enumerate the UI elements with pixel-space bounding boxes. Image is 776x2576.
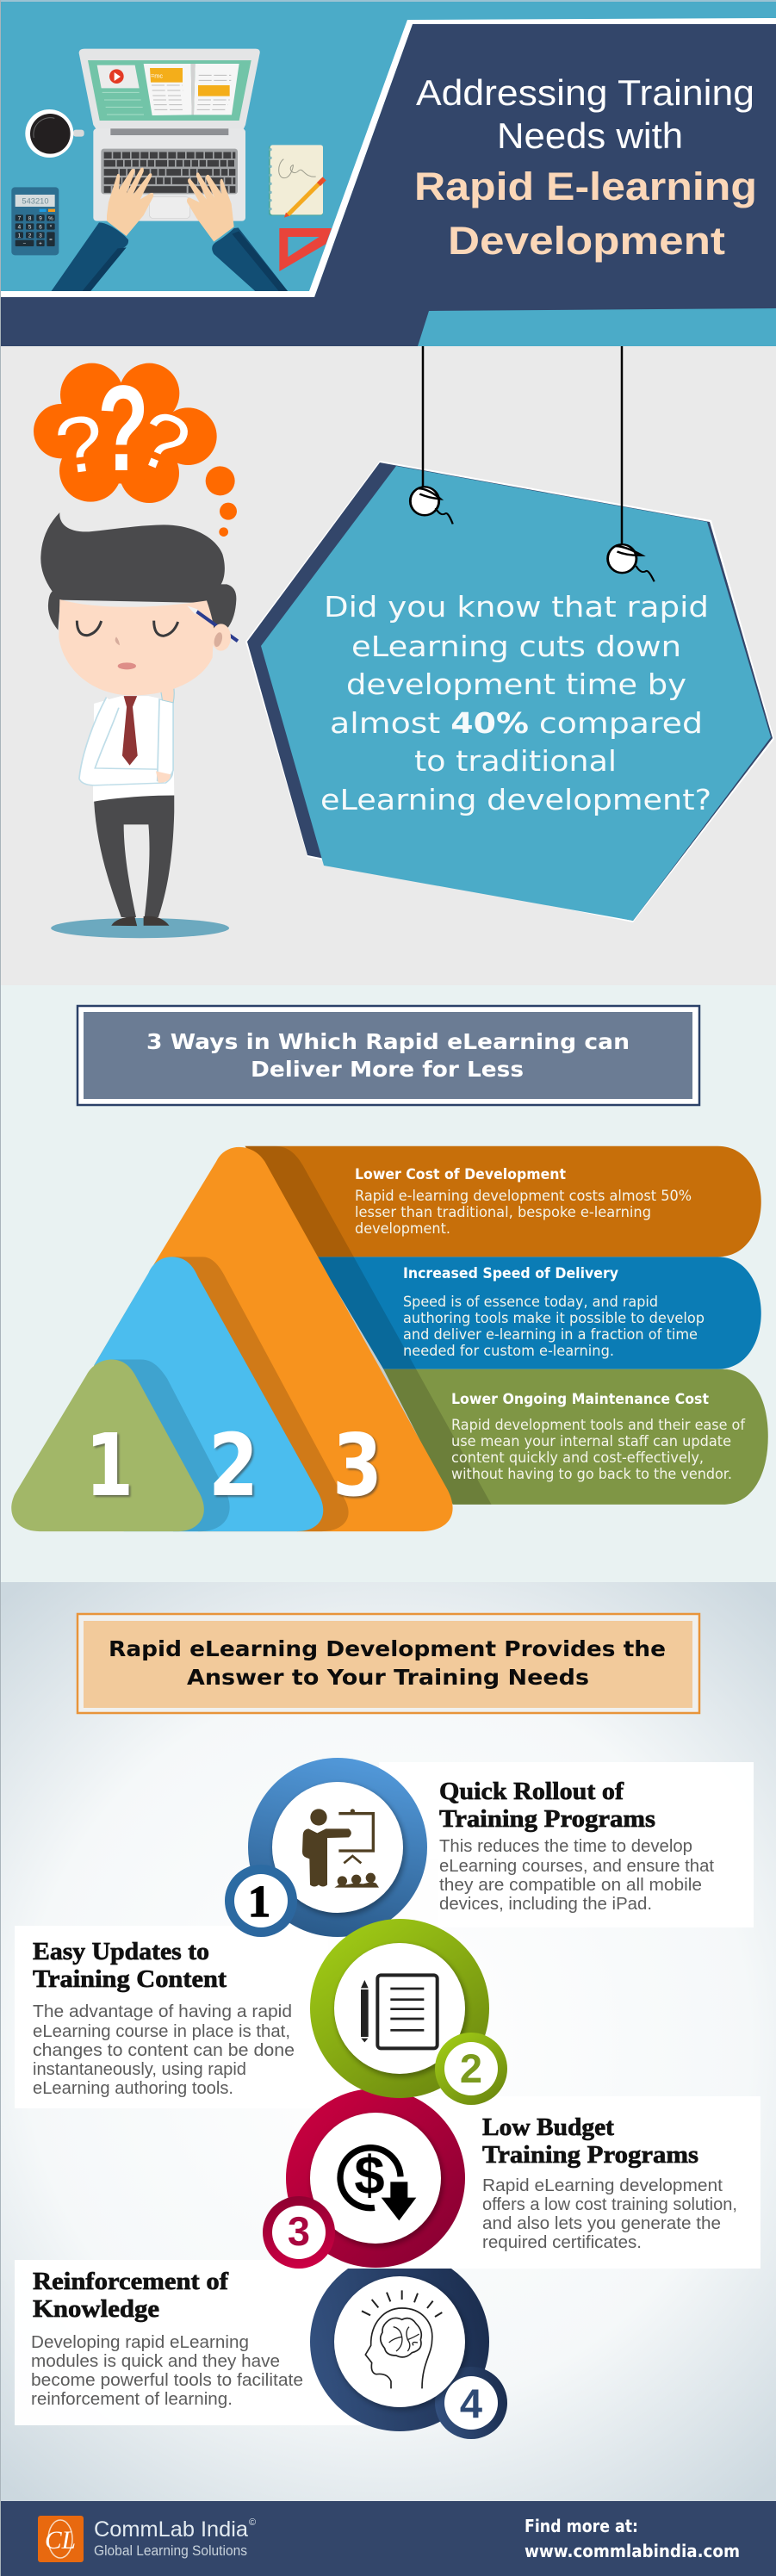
footer — [0, 2501, 776, 2576]
orange triangle 3 — [94, 1147, 453, 1531]
icon: coffee cup — [25, 109, 84, 158]
thought cloud: ? — [126, 393, 201, 492]
text: lower maintenance — [451, 1391, 746, 1482]
text: reinforcement: Knowledge — [33, 2295, 159, 2323]
text: quick rollout: This reduces the time to develop — [439, 1837, 692, 1856]
text: reinforcement: Developing rapid eLearning — [31, 2333, 249, 2352]
callout text: eLearning cuts down — [351, 630, 681, 663]
logo: CL — [45, 2526, 76, 2554]
text: lower maintenance: without having to go back to the vendor. — [451, 1466, 732, 1482]
band 1 — [245, 1146, 761, 1257]
text: lower cost: lesser than traditional, bespoke e-learning — [355, 1204, 651, 1220]
icon: calculator: 1 — [18, 233, 22, 239]
heading box: Deliver More for Less — [251, 1057, 524, 1082]
heading box — [78, 1006, 699, 1105]
icon: laptop — [79, 49, 260, 221]
text: lower maintenance: Lower Ongoing Maintenance Cost — [451, 1391, 709, 1407]
text: lower cost — [355, 1166, 692, 1237]
hanging strings — [423, 346, 622, 546]
icon: dollar down arrow: $ — [354, 2145, 385, 2206]
text: easy updates: eLearning course in place is that, — [33, 2022, 290, 2041]
icon: calculator: 4 — [18, 224, 22, 230]
title — [414, 72, 757, 263]
title: Rapid E-learning — [414, 164, 757, 208]
item 1 ring — [225, 1758, 427, 1937]
icon: calculator: 8 — [28, 215, 32, 221]
pyramid diagram — [11, 1146, 768, 1531]
text: quick rollout: eLearning courses, and ensure that — [439, 1857, 714, 1876]
icon: calculator: % — [48, 215, 53, 221]
text: reinforcement: become powerful tools to facilitate — [31, 2371, 303, 2390]
item 2 ring — [310, 1919, 507, 2105]
text: lower maintenance: Rapid development tools and their ease of — [451, 1417, 746, 1433]
text: reinforcement — [31, 2268, 303, 2409]
callout text — [320, 590, 711, 816]
green triangle 1 — [11, 1360, 204, 1531]
text: quick rollout: Quick Rollout of — [439, 1778, 624, 1805]
text: reinforcement: modules is quick and they have — [31, 2352, 280, 2371]
text: increased speed: Speed is of essence today, and rapid — [403, 1294, 658, 1310]
icon: brain head — [362, 2290, 442, 2388]
icon: calculator: + — [39, 240, 42, 246]
text: low budget: Rapid eLearning development — [482, 2176, 723, 2195]
panel: header — [0, 0, 776, 346]
string hooks — [410, 487, 655, 581]
icon: right hand and sleeve — [187, 172, 288, 291]
character head — [40, 512, 238, 695]
thought cloud: ? — [50, 398, 109, 492]
text: lower cost: development. — [355, 1220, 450, 1237]
title: Addressing Training — [416, 72, 754, 113]
text: quick rollout: they are compatible on all mobile — [439, 1876, 702, 1895]
icon: notepad and pen — [269, 145, 325, 218]
logo: © — [249, 2517, 256, 2528]
band 2 — [317, 1257, 761, 1369]
text: low budget: and also lets you generate the — [482, 2214, 721, 2233]
text: reinforcement: reinforcement of learning. — [31, 2390, 233, 2409]
pyramid numbers — [85, 1415, 382, 1516]
text: increased speed — [403, 1265, 705, 1359]
text: easy updates: The advantage of having a rapid — [33, 2002, 292, 2021]
text: quick rollout — [439, 1778, 714, 1914]
item 1 ring: 1 — [248, 1878, 270, 1927]
text: lower cost: Rapid e-learning development costs almost 50% — [355, 1188, 692, 1204]
heading box — [78, 1614, 699, 1713]
icon: calculator: − — [22, 240, 26, 246]
pyramid numbers: 3 — [332, 1415, 382, 1516]
text: low budget: Low Budget — [482, 2114, 614, 2141]
card backgrounds — [15, 1762, 754, 2425]
white border stripe — [0, 18, 776, 297]
icon: dollar down arrow — [340, 2145, 416, 2220]
icon: calculator — [11, 187, 59, 255]
text: lower maintenance: use mean your internal staff can update — [451, 1433, 731, 1449]
panel: 3 ways — [0, 985, 776, 1582]
text: reinforcement: Reinforcement of — [33, 2268, 228, 2295]
text: low budget: Training Programs — [482, 2141, 698, 2169]
icon: calculator: 7 — [18, 215, 22, 221]
icon: calculator: * — [50, 224, 53, 230]
text: lower maintenance: content quickly and cost-effectively, — [451, 1449, 704, 1466]
text: quick rollout: devices, including the iPad. — [439, 1895, 652, 1914]
find more: www.commlabindia.com — [525, 2541, 740, 2561]
callout text: to traditional — [414, 744, 617, 778]
band 3 — [383, 1369, 768, 1505]
find more: Find more at: — [525, 2516, 638, 2536]
text: easy updates: Easy Updates to — [33, 1938, 209, 1965]
thought cloud — [34, 361, 237, 537]
text: easy updates: Training Content — [33, 1965, 227, 1993]
text: easy updates — [33, 1938, 295, 2098]
pyramid numbers: 1 — [85, 1415, 133, 1516]
item 4 ring — [310, 2252, 507, 2439]
item 3 ring — [263, 2089, 465, 2269]
laptop illustration — [11, 49, 332, 291]
icon: document and pencil — [361, 1975, 438, 2048]
icon: calculator: 2 — [28, 233, 32, 239]
text: increased speed: Increased Speed of Delivery — [403, 1265, 618, 1282]
icon: calculator: 3 — [39, 233, 42, 239]
logo — [38, 2516, 256, 2562]
callout text: Did you know that rapid — [324, 590, 709, 624]
callout text: development time by — [346, 667, 686, 701]
text: low budget: required certificates. — [482, 2233, 642, 2252]
item 3 ring: 3 — [288, 2208, 310, 2254]
heading box: 3 Ways in Which Rapid eLearning can — [146, 1029, 630, 1054]
title: Development — [448, 219, 725, 263]
navy title panel — [0, 24, 776, 346]
callout text: eLearning development? — [320, 783, 711, 816]
logo: CommLab India — [94, 2517, 248, 2542]
callout text: almost 40% compared — [330, 706, 703, 740]
logo: Global Learning Solutions — [94, 2542, 247, 2559]
text: easy updates: eLearning authoring tools. — [33, 2079, 233, 2098]
icon: presenter — [302, 1809, 379, 1888]
text: quick rollout: Training Programs — [439, 1805, 655, 1833]
icon: calculator: 5 — [28, 224, 32, 230]
item 4 number: 4 — [460, 2380, 482, 2426]
icon: set square ruler — [279, 228, 332, 271]
text: lower cost: Lower Cost of Development — [355, 1166, 566, 1182]
text: increased speed: needed for custom e-learning. — [403, 1343, 614, 1359]
item 2 ring: 2 — [460, 2045, 482, 2091]
icon: calculator: 543210 — [22, 196, 49, 205]
character: thinking man — [40, 512, 238, 938]
panel: did you know — [0, 346, 776, 985]
thought cloud: ? — [97, 361, 149, 497]
title: Needs with — [497, 115, 683, 156]
pyramid numbers: 2 — [208, 1415, 258, 1516]
heading box: Answer to Your Training Needs — [187, 1665, 589, 1690]
panel: training needs — [0, 1582, 776, 2501]
heading box: Rapid eLearning Development Provides the — [109, 1636, 666, 1661]
text: increased speed: and deliver e-learning in a fraction of time — [403, 1326, 698, 1343]
text: low budget — [482, 2114, 737, 2252]
icon: left hand and sleeve — [51, 168, 153, 291]
text: low budget: offers a low cost training solution, — [482, 2195, 737, 2214]
find more — [525, 2516, 740, 2561]
hexagon callout — [245, 346, 774, 922]
icon: calculator: = — [49, 237, 53, 243]
text: easy updates: instantaneously, using rapid — [33, 2060, 246, 2079]
icon: calculator: 6 — [39, 224, 42, 230]
blue triangle 2 — [94, 1257, 323, 1531]
card: low budget — [413, 2096, 760, 2269]
text: increased speed: authoring tools make it possible to develop — [403, 1310, 705, 1326]
icon: calculator: 9 — [39, 215, 42, 221]
character body — [51, 685, 229, 938]
icon: laptop: =mc — [151, 72, 163, 80]
text: easy updates: changes to content can be done — [33, 2041, 295, 2060]
